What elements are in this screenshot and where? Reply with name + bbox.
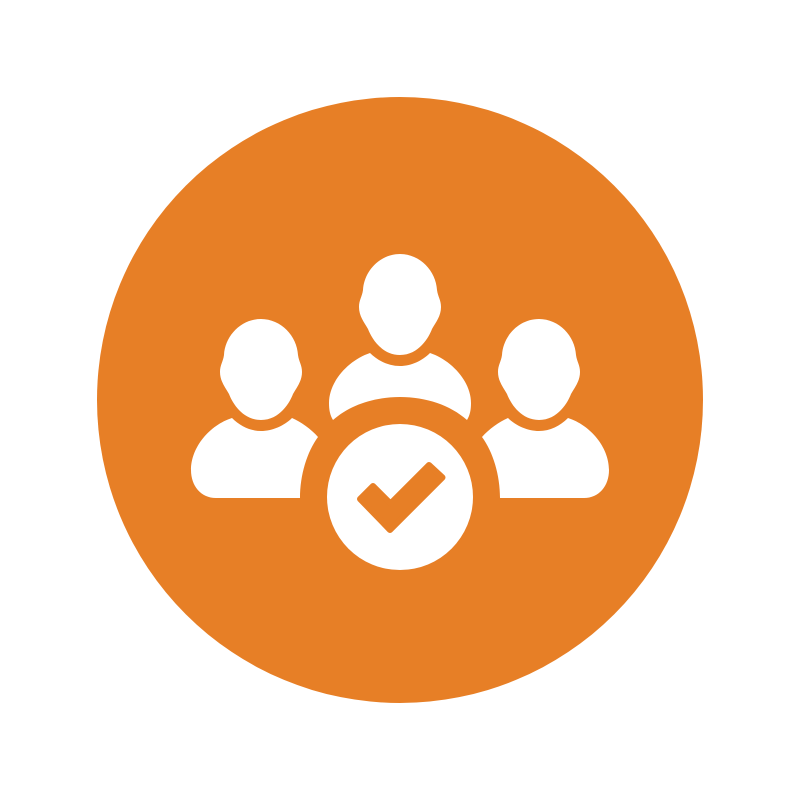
head: right [498, 319, 580, 420]
person: right [482, 319, 609, 498]
body: right [482, 418, 609, 498]
orange background circle [97, 97, 703, 703]
body: top centre [329, 353, 471, 420]
person: top centre [329, 254, 471, 420]
head: top centre [359, 254, 441, 355]
person: left [191, 319, 318, 498]
check mark [360, 465, 442, 530]
badge circle [327, 424, 473, 570]
body: left [191, 418, 318, 498]
head: left [220, 319, 302, 420]
check badge [327, 424, 473, 570]
